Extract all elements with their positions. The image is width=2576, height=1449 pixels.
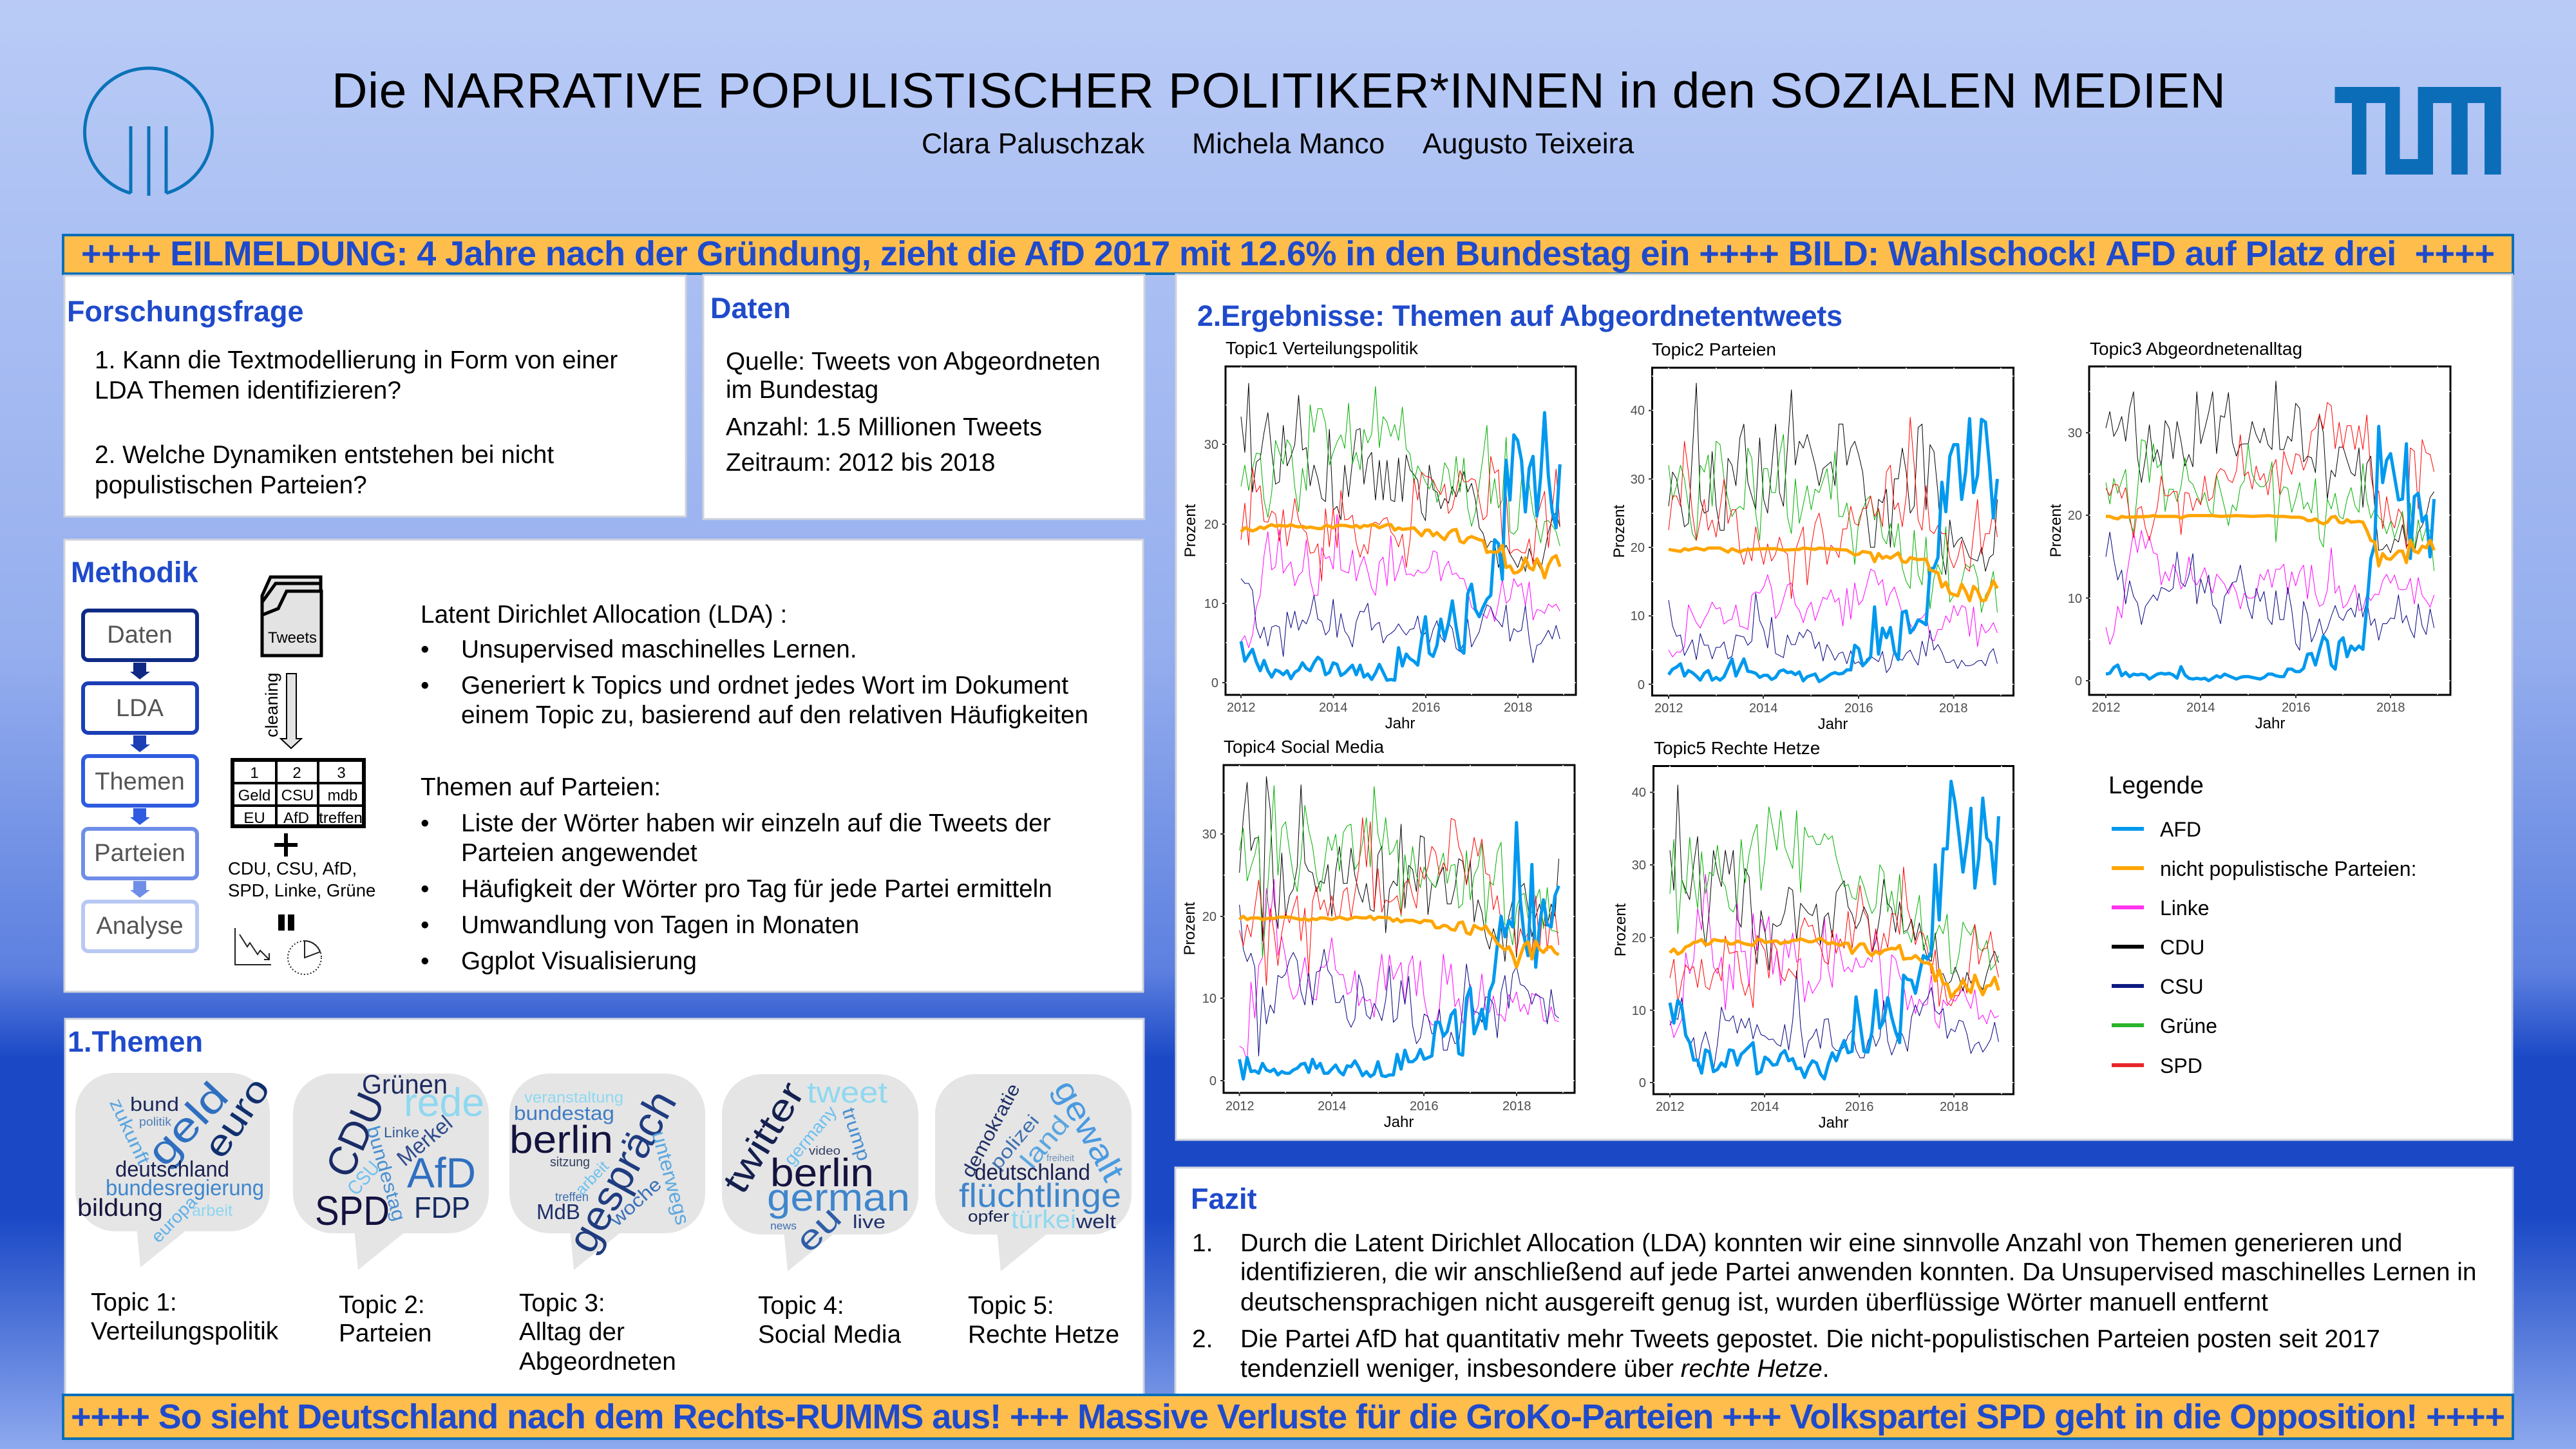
text block: LDA explanation [421, 601, 1088, 729]
text block: data facts: Zeitraum: 2012 bis 2018 [726, 449, 995, 477]
line chart: topic 3: Jahr [2255, 715, 2285, 732]
line chart: topic 1: 2012 [1227, 701, 1256, 715]
line chart: topic 2: Prozent [1611, 504, 1628, 558]
word cloud: topic 1 [75, 1070, 278, 1267]
flowchart: method steps: Themen [95, 768, 185, 795]
heading: Methodik: Methodik [71, 556, 198, 589]
word cloud: topic 2: Linke [384, 1124, 419, 1141]
heading: Forschungsfrage: Forschungsfrage [67, 295, 304, 328]
word cloud: topic 5: deutschland [974, 1160, 1090, 1185]
line chart: topic 4: Jahr [1384, 1113, 1414, 1131]
line chart: topic 1: Jahr [1385, 715, 1415, 732]
text block: topics on parties: Themen auf Parteien: [421, 773, 661, 801]
line chart: topic 5: 2018 [1940, 1100, 1968, 1114]
table: topic words: CSU [281, 787, 314, 804]
text block: party list: SPD, Linke, Grüne [228, 880, 375, 900]
word cloud: topic 1: bund [130, 1093, 179, 1115]
table: topic words: 2 [292, 764, 301, 782]
word cloud: topic 2: AfD [407, 1149, 476, 1197]
line chart: topic 3: Prozent [2047, 504, 2065, 557]
caption: topic 4: Social Media [758, 1321, 902, 1349]
line chart: topic 3: 0 [2075, 674, 2082, 688]
line chart: topic 3: 20 [2068, 509, 2082, 523]
legend [2108, 772, 2416, 1077]
panel: Themen [65, 1019, 1144, 1399]
line chart: topic 4: 30 [1202, 828, 1217, 842]
title: Die NARRATIVE POPULISTISCHER POLITIKER*INNEN in den SOZIALEN MEDIEN [332, 63, 2226, 118]
word cloud: topic 5: gewalt [1047, 1074, 1132, 1187]
line chart: topic 4: Prozent [1181, 902, 1198, 955]
line chart: topic 5: 10 [1632, 1004, 1646, 1018]
word cloud: topic 5: flüchtlinge [959, 1177, 1121, 1215]
line chart: topic 2: 2014 [1749, 701, 1777, 715]
text block: data facts: Anzahl: 1.5 Millionen Tweets [726, 413, 1042, 441]
panel: Ergebnisse [1176, 274, 2512, 1140]
legend: Linke [2160, 896, 2209, 920]
caption: topic 1: Topic 1: [91, 1289, 177, 1316]
text block: conclusion 2 [1192, 1325, 2380, 1383]
line chart: topic 1 [1182, 338, 1576, 732]
line chart: topic 1: 30 [1204, 438, 1218, 452]
line chart: topic 4: Topic4 Social Media [1224, 737, 1384, 757]
text block: party list [228, 858, 375, 900]
icon: pause bars [278, 914, 294, 931]
line chart: topic 3: 2018 [2376, 701, 2405, 715]
icon: tweets documents: Tweets [268, 629, 317, 647]
word cloud: topic 3: unterwegs [647, 1129, 694, 1227]
text block: topics on parties: Umwandlung von Tagen in Monaten [461, 911, 859, 939]
word cloud: topic 3: sitzung [550, 1155, 590, 1170]
caption: topic 1: Verteilungspolitik [91, 1318, 279, 1345]
word cloud: topic 1: europa [147, 1192, 201, 1246]
word cloud: topic 4: twitter [715, 1075, 813, 1200]
word cloud: topic 3 [509, 1074, 705, 1270]
caption: topic 4 [758, 1292, 902, 1349]
word cloud: topic 4: berlin [770, 1151, 874, 1195]
logo: TUM [2335, 87, 2501, 175]
word cloud: topic 4: news [770, 1220, 797, 1232]
text block: topics on parties: • [421, 911, 430, 939]
panel: Forschungsfrage [64, 276, 686, 516]
line chart: topic 4 [1181, 737, 1575, 1131]
word cloud: topic 4 [715, 1074, 918, 1271]
line chart: topic 1: 2018 [1504, 701, 1533, 715]
text block: topics on parties: Häufigkeit der Wörter pro Tag für jede Partei ermitteln [461, 875, 1052, 903]
authors: Clara Paluschzak [922, 128, 1145, 160]
text block: research questions: 1. Kann die Textmodellierung in Form von einer [95, 346, 618, 374]
line chart: topic 5: Prozent [1612, 903, 1629, 956]
word cloud: topic 1: bildung [77, 1195, 163, 1222]
line chart: topic 5: 0 [1639, 1076, 1646, 1090]
caption: topic 3 [519, 1289, 676, 1376]
icon: line chart [235, 928, 271, 965]
line chart: topic 3: 2014 [2186, 701, 2215, 715]
word cloud: topic 1: deutschland [115, 1157, 229, 1182]
word cloud: topic 4: trump [838, 1105, 874, 1164]
word cloud: topic 3: veranstaltung [524, 1089, 623, 1106]
line chart: topic 4: 2012 [1226, 1099, 1255, 1113]
line chart: topic 2: 40 [1631, 404, 1645, 418]
word cloud: topic 3: woche [606, 1174, 666, 1231]
flowchart: method steps: Parteien [94, 840, 185, 867]
text block: LDA explanation: • [421, 636, 430, 663]
text block: conclusion 1: deutschensprachigen nicht ausgereift genug ist, wurden überflüssige Wörter manuell entfernt [1240, 1289, 2268, 1316]
line chart: topic 5: 40 [1632, 786, 1646, 800]
table: topic words: AfD [283, 810, 309, 827]
text block: research questions: populistischen Parteien? [95, 471, 367, 499]
line chart: topic 2 [1611, 339, 2014, 733]
text block: research questions [95, 346, 618, 499]
line chart: topic 1: Topic1 Verteilungspolitik [1226, 338, 1419, 358]
line chart: topic 4: 2016 [1410, 1099, 1439, 1113]
word cloud: topic 5: land [1015, 1110, 1075, 1174]
line chart: topic 1: 2016 [1412, 701, 1440, 715]
text block: topics on parties: • [421, 810, 430, 837]
word cloud: topic 2: FDP [414, 1191, 470, 1224]
flowchart: method steps: LDA [116, 695, 164, 722]
panel: Daten [703, 275, 1144, 519]
text block: topics on parties: Ggplot Visualisierung [461, 947, 697, 975]
arrow: cleaning [262, 672, 301, 748]
text block: research questions: LDA Themen identifizieren? [95, 377, 401, 404]
text block: LDA explanation: Generiert k Topics und ordnet jedes Wort im Dokument [461, 672, 1068, 699]
text block: LDA explanation: Unsupervised maschinelles Lernen. [461, 636, 857, 663]
word cloud: topic 2: CSU [343, 1157, 384, 1200]
line chart: topic 2: 2018 [1939, 701, 1968, 715]
word cloud: topic 1: zukunft [105, 1095, 154, 1168]
heading: 1.Themen: 1.Themen [68, 1025, 203, 1058]
line chart: topic 2: 30 [1631, 473, 1645, 487]
word cloud: topic 2: Merkel [392, 1111, 457, 1171]
word cloud: topic 3: MdB [536, 1200, 580, 1224]
flowchart: method steps: Analyse [96, 913, 184, 940]
line chart: topic 1: 0 [1211, 676, 1218, 690]
icon: pie chart [288, 941, 321, 974]
panel: Fazit [1175, 1168, 2513, 1399]
table: topic words: 3 [337, 764, 346, 782]
text block: conclusion 1 [1192, 1229, 2476, 1316]
caption: topic 5: Topic 5: [968, 1292, 1054, 1320]
logo: university seal [84, 68, 212, 196]
heading: Ergebnisse: 2.Ergebnisse: Themen auf Abgeordnetentweets [1197, 299, 1842, 332]
line chart: topic 2: 0 [1638, 678, 1645, 692]
word cloud: topic 1: geld [138, 1074, 237, 1175]
word cloud: topic 5: opfer [968, 1208, 1009, 1226]
line chart: topic 1: 10 [1204, 597, 1218, 611]
caption: topic 5: Rechte Hetze [968, 1321, 1119, 1349]
line chart: topic 3: 2012 [2092, 701, 2120, 715]
ticker: top breaking news: ++++ EILMELDUNG: 4 Jahre nach der Gründung, zieht die AfD 2017 mit 12.6% in den Bundestag ein ++++ BILD: Wahlschock! AFD auf Platz drei ++++ [81, 234, 2495, 273]
word cloud: topic 3: gespräch [558, 1082, 685, 1260]
text block: conclusion 2: Die Partei AfD hat quantitativ mehr Tweets gepostet. Die nicht-populistischen Parteien posten seit 2017 [1240, 1325, 2380, 1353]
text block: LDA explanation: einem Topic zu, basierend auf den relativen Häufigkeiten [461, 701, 1088, 729]
heading: Daten: Daten [710, 292, 791, 325]
line chart: topic 3 [2047, 339, 2450, 732]
legend: nicht populistische Parteien: [2160, 857, 2416, 880]
line chart: topic 1: 2014 [1319, 701, 1347, 715]
line chart: topic 2: 20 [1631, 541, 1645, 555]
word cloud: topic 5 [935, 1074, 1132, 1271]
line chart: topic 3: Topic3 Abgeordnetenalltag [2090, 339, 2302, 359]
caption: topic 2: Parteien [339, 1320, 432, 1347]
line chart: topic 5: Topic5 Rechte Hetze [1654, 738, 1820, 758]
line chart: topic 5: 2012 [1656, 1100, 1685, 1114]
caption: topic 3: Topic 3: [519, 1289, 605, 1317]
icon: plus [274, 833, 298, 857]
word cloud: topic 4: video [809, 1144, 840, 1157]
text block: conclusion 1: 1. [1192, 1229, 1213, 1257]
table: topic words: Geld [238, 787, 270, 804]
text block: topics on parties [421, 773, 1052, 975]
text block: LDA explanation: Latent Dirichlet Allocation (LDA) : [421, 601, 787, 629]
line chart: topic 3: 30 [2068, 426, 2082, 440]
text block: topics on parties: Liste der Wörter haben wir einzeln auf die Tweets der [461, 810, 1051, 837]
word cloud: topic 4: eu [788, 1198, 849, 1260]
line chart: topic 4: 0 [1209, 1074, 1217, 1088]
caption: topic 1 [91, 1289, 279, 1345]
legend: CDU [2160, 936, 2204, 959]
word cloud: topic 1: politik [139, 1115, 172, 1128]
text block: research questions: 2. Welche Dynamiken entstehen bei nicht [95, 441, 554, 469]
word cloud: topic 5: demokratie [958, 1080, 1025, 1181]
word cloud: topic 4: tweet [807, 1075, 887, 1109]
caption: topic 2: Topic 2: [339, 1291, 425, 1319]
text block: party list: CDU, CSU, AfD, [228, 858, 357, 878]
line chart: topic 4: 20 [1202, 910, 1217, 924]
word cloud: topic 4: germany [781, 1102, 841, 1169]
line chart: topic 2: Jahr [1818, 715, 1848, 733]
text block: topics on parties: Parteien angewendet [461, 839, 697, 867]
text block: conclusion 1: Durch die Latent Dirichlet Allocation (LDA) konnten wir eine sinnvolle Anzahl von Themen generieren und [1240, 1229, 2402, 1257]
word cloud: topic 5: freiheit [1046, 1153, 1075, 1164]
line chart: topic 2: 2012 [1654, 701, 1683, 715]
legend: CSU [2160, 975, 2204, 998]
word cloud: topic 3: treffen [555, 1191, 589, 1204]
text block: conclusion 2: 2. [1192, 1325, 1213, 1353]
caption: topic 3: Abgeordneten [519, 1348, 676, 1376]
panel: Methodik [64, 540, 1143, 992]
legend: Legende [2108, 772, 2204, 799]
icon: tweets documents [262, 577, 321, 656]
line chart: topic 1: Prozent [1182, 504, 1199, 557]
word cloud: topic 5: polizei [986, 1111, 1043, 1173]
word cloud: topic 3: berlin [509, 1118, 613, 1161]
table: topic words: treffen [319, 810, 363, 827]
word cloud: topic 4: german [767, 1176, 910, 1219]
line chart: topic 2: Topic2 Parteien [1652, 339, 1776, 359]
word cloud: topic 5: türkei [1011, 1206, 1076, 1234]
legend: AFD [2160, 818, 2201, 841]
line chart: topic 3: 2016 [2282, 701, 2311, 715]
word cloud: topic 1: euro [195, 1070, 278, 1165]
word cloud: topic 2: rede [404, 1081, 484, 1125]
word cloud: topic 2: CDU [317, 1086, 393, 1184]
text block: conclusion 1: identifizieren, die wir anschließend auf jede Partei anwenden konnten. Da Unsupervised maschinelles Lernen in [1240, 1258, 2476, 1286]
table: topic words: mdb [328, 787, 357, 804]
caption: topic 3: Alltag der [519, 1318, 625, 1346]
legend: Grüne [2160, 1014, 2217, 1037]
line chart: topic 5: 30 [1632, 858, 1646, 873]
arrow: cleaning: cleaning [262, 672, 281, 737]
word cloud: topic 4: live [853, 1212, 886, 1233]
caption: topic 5 [968, 1292, 1119, 1349]
authors [922, 128, 1634, 160]
line chart: topic 3: 10 [2068, 592, 2082, 606]
line chart: topic 5: Jahr [1819, 1114, 1848, 1132]
line chart: topic 4: 10 [1202, 992, 1217, 1006]
text block: topics on parties: • [421, 947, 430, 975]
word cloud: topic 2: SPD [315, 1188, 390, 1234]
text block: data facts [726, 348, 1101, 477]
word cloud: topic 1: arbeit [192, 1202, 232, 1220]
table: topic words: EU [243, 810, 265, 827]
line chart: topic 2: 2016 [1844, 701, 1873, 715]
word cloud: topic 5: welt [1075, 1210, 1116, 1233]
authors: Michela Manco [1192, 128, 1385, 160]
line chart: topic 5: 2016 [1845, 1100, 1874, 1114]
word cloud: topic 3: bundestag [514, 1102, 614, 1124]
text block: LDA explanation: • [421, 672, 430, 699]
caption: topic 4: Topic 4: [758, 1292, 844, 1320]
text block: topics on parties: • [421, 875, 430, 903]
line chart: topic 4: 2014 [1318, 1099, 1346, 1113]
line chart: topic 5: 2014 [1750, 1100, 1779, 1114]
line chart: topic 5: 20 [1632, 931, 1646, 945]
table: topic words [232, 760, 364, 827]
table: topic words: 1 [250, 764, 259, 782]
flowchart: method steps [83, 611, 197, 951]
ticker: bottom news: ++++ So sieht Deutschland nach dem Rechts-RUMMS aus! +++ Massive Verluste für die GroKo-Parteien +++ Volkspartei SPD geht in die Opposition! ++++ [71, 1397, 2505, 1436]
line chart: topic 5 [1612, 738, 2014, 1132]
line chart: topic 1: 20 [1204, 518, 1218, 532]
line chart: topic 4: 2018 [1502, 1099, 1531, 1113]
heading: Fazit: Fazit [1191, 1182, 1257, 1215]
word cloud: topic 2 [293, 1069, 489, 1270]
caption: topic 2 [339, 1291, 432, 1347]
word cloud: topic 2: Grünen [362, 1069, 448, 1099]
word cloud: topic 2: bundestag [363, 1124, 409, 1224]
flowchart: method steps: Daten [107, 621, 173, 649]
text block: data facts: im Bundestag [726, 376, 878, 404]
word cloud: topic 3: arbeit [572, 1158, 612, 1198]
text block: data facts: Quelle: Tweets von Abgeordneten [726, 348, 1101, 375]
word cloud: topic 1: bundesregierung [106, 1176, 264, 1200]
authors: Augusto Teixeira [1423, 128, 1634, 160]
line chart: topic 2: 10 [1631, 609, 1645, 623]
legend: SPD [2160, 1054, 2202, 1077]
text block: conclusion 2: tendenziell weniger, insbesondere über rechte Hetze. [1240, 1355, 1829, 1383]
